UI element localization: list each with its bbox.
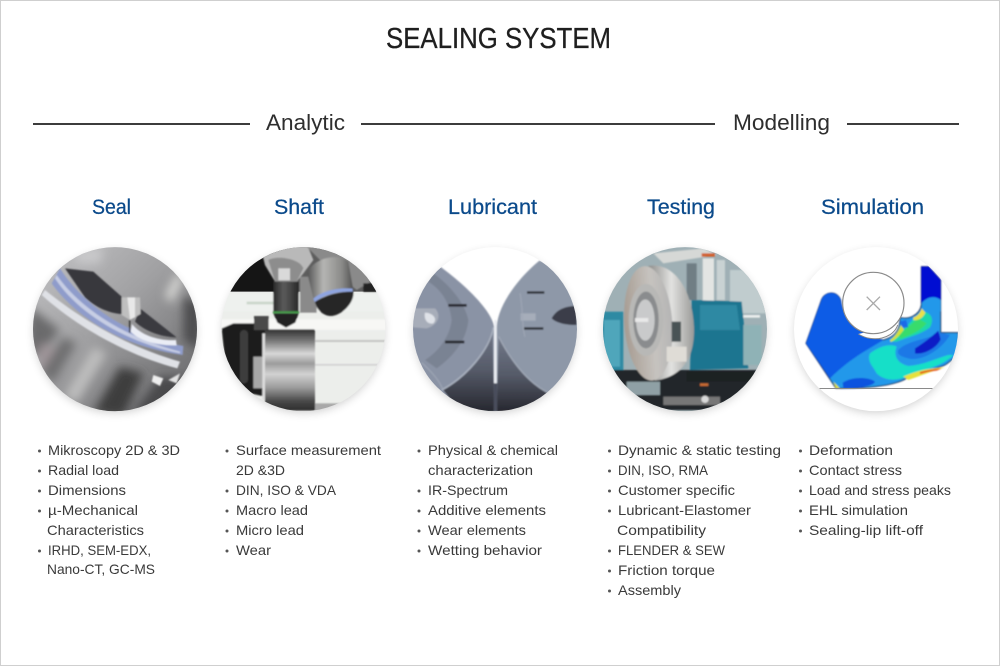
list: Lubricant: characterization: [428, 462, 533, 478]
list: Testing: Friction torque: [618, 562, 715, 578]
list: Lubricant: Wear elements: [428, 522, 526, 538]
list: Testing: FLENDER & SEW: [618, 542, 726, 558]
list: Shaft: Micro lead: [236, 522, 304, 538]
column heading: Lubricant: Lubricant: [448, 196, 537, 219]
label: Analytic: Analytic: [266, 110, 345, 135]
list: Seal: [38, 442, 180, 577]
photo: shaft under microscope: [221, 247, 385, 411]
list: Seal: Mikroscopy 2D & 3D: [48, 442, 180, 458]
column heading: Testing: Testing: [647, 196, 715, 219]
list: Shaft: [226, 442, 381, 558]
list: Lubricant: Additive elements: [428, 502, 546, 518]
list: Simulation: EHL simulation: [809, 502, 908, 518]
list: Simulation: Deformation: [809, 442, 893, 458]
photo: seal: [33, 247, 197, 412]
list: Seal: Radial load: [48, 462, 119, 478]
list: Testing: Dynamic & static testing: [618, 442, 781, 458]
column heading: Seal: Seal: [92, 196, 131, 219]
list: Lubricant: [418, 442, 558, 558]
list: Shaft: DIN, ISO & VDA: [236, 482, 337, 498]
list: Seal: µ-Mechanical: [48, 502, 138, 518]
list: Testing: [608, 442, 781, 598]
list: Testing: DIN, ISO, RMA: [618, 462, 709, 478]
list: Testing: Assembly: [618, 582, 681, 598]
list: Simulation: [799, 442, 951, 538]
column heading: Shaft: Shaft: [274, 196, 324, 219]
list: Simulation: Contact stress: [809, 462, 902, 478]
banner: Analytic and Modelling: [33, 110, 959, 135]
list: Simulation: Sealing-lip lift-off: [809, 522, 923, 538]
list: Testing: Customer specific: [618, 482, 735, 498]
list: Lubricant: Wetting behavior: [428, 542, 542, 558]
list: Simulation: Load and stress peaks: [809, 482, 951, 498]
list: Seal: Nano-CT, GC-MS: [47, 561, 155, 577]
list: Seal: Characteristics: [47, 522, 144, 538]
list: Shaft: 2D &3D: [236, 462, 285, 478]
list: Shaft: Surface measurement: [236, 442, 381, 458]
list: Testing: Lubricant-Elastomer: [618, 502, 751, 518]
photo: testing machine: [603, 247, 767, 412]
list: Testing: Compatibility: [617, 522, 706, 538]
title: SEALING SYSTEM: [386, 23, 611, 55]
list: Seal: IRHD, SEM-EDX,: [48, 542, 151, 558]
list: Lubricant: IR-Spectrum: [428, 482, 508, 498]
list: Seal: Dimensions: [48, 482, 126, 498]
circle shadows: [35, 252, 956, 412]
list: Shaft: Wear: [236, 542, 271, 558]
chart: FEM stress simulation: [794, 248, 958, 411]
column heading: Simulation: Simulation: [821, 196, 924, 219]
list: Shaft: Macro lead: [236, 502, 308, 518]
label: Modelling: Modelling: [733, 110, 830, 135]
FEM seal body: [806, 267, 958, 388]
shaft outline: [843, 272, 904, 339]
list: Lubricant: Physical & chemical: [428, 442, 558, 458]
photo: lubricant elastomer samples: [413, 248, 577, 412]
